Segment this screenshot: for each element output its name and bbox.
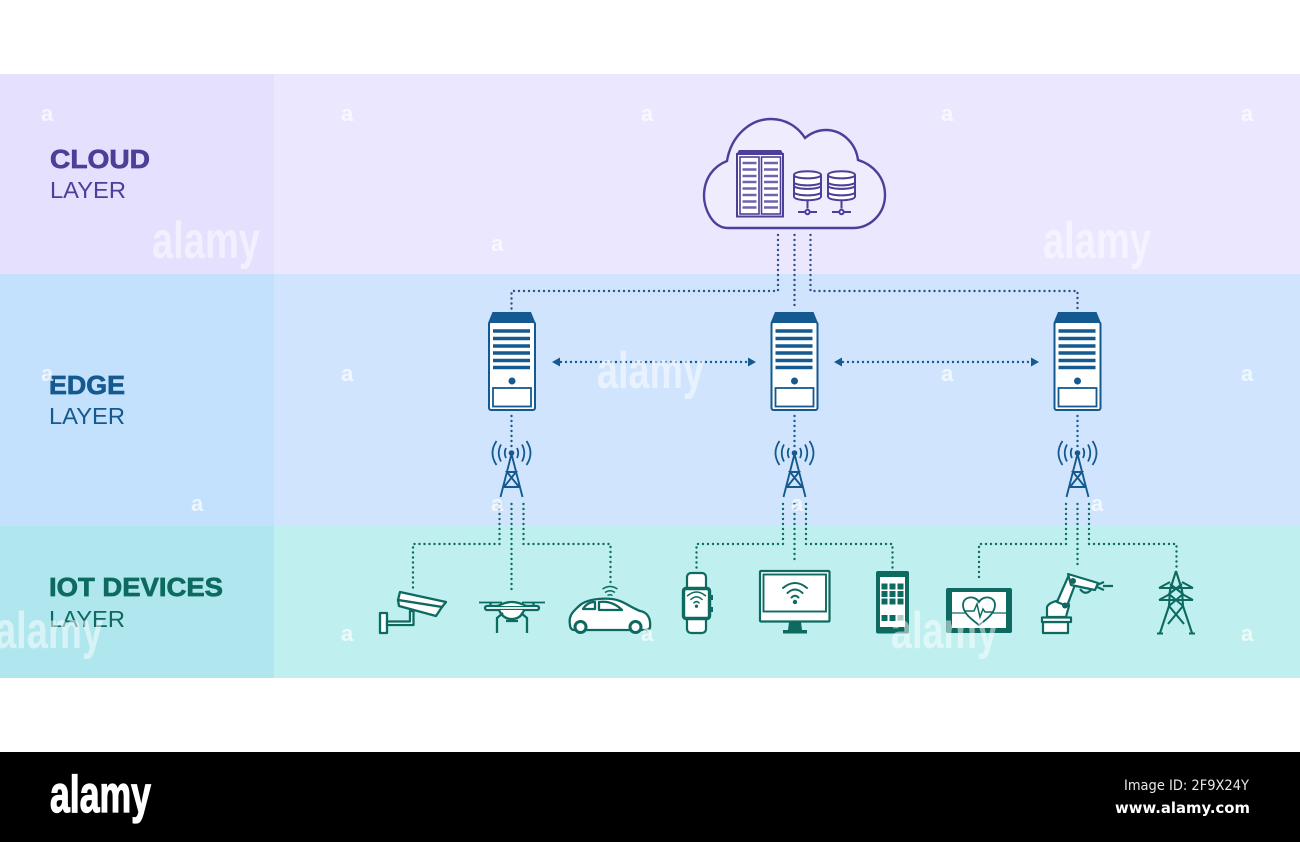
- panel: edge layer band: [0, 274, 1300, 526]
- icon: robotic arm: [1042, 574, 1113, 633]
- watermark: faint alamy marks: a: [791, 491, 804, 516]
- connectors: cloud to edge servers: [512, 235, 1078, 309]
- heading: cloud layer: LAYER: [50, 177, 126, 203]
- watermark: faint alamy marks: a: [641, 621, 654, 646]
- watermark: faint alamy marks: a: [491, 231, 504, 256]
- icon: drone: [479, 602, 545, 633]
- watermark: faint alamy marks: [0, 101, 1254, 660]
- icon: edge server left: [488, 312, 536, 410]
- watermark: faint alamy marks: a: [491, 491, 504, 516]
- watermark: faint alamy marks: alamy: [597, 342, 704, 400]
- icon: smartphone: [876, 571, 909, 634]
- connectors: towers to IoT devices: [413, 504, 1176, 590]
- watermark: faint alamy marks: a: [1241, 621, 1254, 646]
- watermark: faint alamy marks: a: [341, 361, 354, 386]
- icon: server rack: [736, 150, 784, 216]
- icon: security camera: [380, 592, 446, 633]
- heading: IoT devices layer: LAYER: [49, 606, 125, 632]
- heading: edge layer: EDGE: [49, 370, 125, 400]
- icon: tower centre: [776, 441, 814, 497]
- watermark: faint alamy marks: alamy: [152, 212, 260, 270]
- footer logo: alamy: [50, 766, 151, 824]
- watermark: faint alamy marks: a: [641, 101, 654, 126]
- icon: edge server centre: [770, 312, 818, 410]
- watermark: faint alamy marks: a: [941, 101, 954, 126]
- heading: cloud layer: [50, 144, 150, 203]
- heading: edge layer: LAYER: [49, 403, 125, 429]
- connectors: servers to towers: [512, 416, 1078, 448]
- icon: health tablet: [946, 588, 1012, 633]
- website: www.alamy.com: [1115, 799, 1250, 817]
- panel: IoT devices layer band: [0, 526, 1300, 678]
- watermark: faint alamy marks: alamy: [891, 602, 998, 660]
- watermark: faint alamy marks: a: [1241, 361, 1254, 386]
- icon: electricity pylon: [1157, 571, 1195, 634]
- watermark: faint alamy marks: a: [941, 361, 954, 386]
- heading: edge layer: [49, 370, 125, 429]
- icon: tower right: [1058, 441, 1096, 497]
- watermark: faint alamy marks: a: [41, 361, 54, 386]
- panel: cloud layer band: [0, 74, 1300, 274]
- watermark: faint alamy marks: a: [1241, 101, 1254, 126]
- watermark: faint alamy marks: a: [41, 101, 54, 126]
- icon: database one: [794, 171, 821, 214]
- connectors: server to server arrows: [552, 358, 1039, 366]
- icon: database two: [828, 171, 855, 214]
- watermark: faint alamy marks: a: [1091, 491, 1104, 516]
- watermark: faint alamy marks: a: [341, 101, 354, 126]
- footer bar: [0, 752, 1300, 842]
- heading: cloud layer: CLOUD: [50, 144, 150, 174]
- icon: connected car: [570, 586, 650, 632]
- icon: smartwatch: [684, 573, 713, 633]
- watermark: faint alamy marks: alamy: [1043, 212, 1151, 270]
- watermark: faint alamy marks: a: [191, 491, 204, 516]
- image id: Image ID: 2F9X24Y: [1124, 778, 1249, 794]
- heading: IoT devices layer: IOT DEVICES: [49, 572, 223, 602]
- icon: desktop monitor: [760, 571, 830, 634]
- icon: tower left: [492, 441, 530, 497]
- heading: IoT devices layer: [49, 572, 223, 632]
- icon: edge server right: [1054, 312, 1101, 410]
- icon: cloud with rack and databases: [704, 119, 885, 228]
- watermark: faint alamy marks: a: [341, 621, 354, 646]
